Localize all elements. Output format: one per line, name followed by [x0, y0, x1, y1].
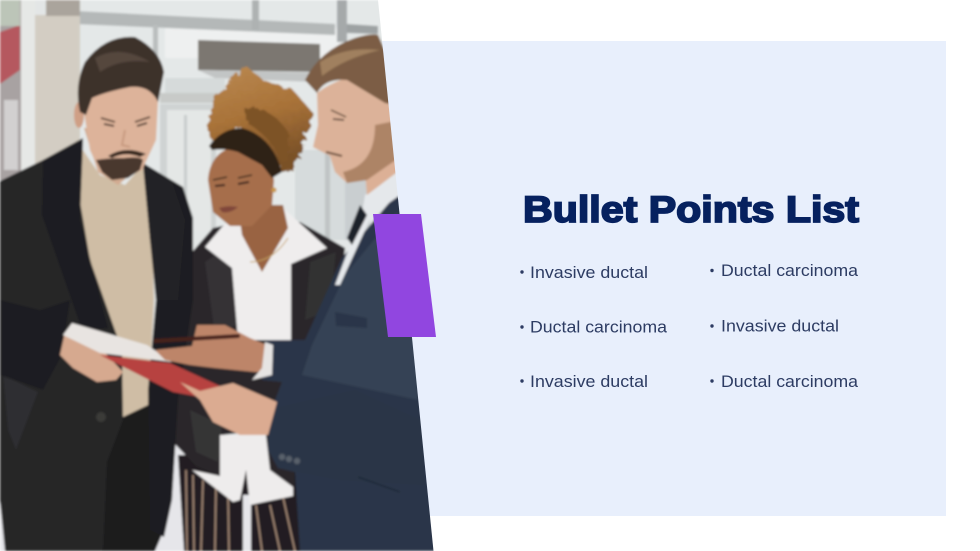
folder and papers — [63, 323, 222, 397]
man left: beard and moustache — [96, 157, 143, 180]
man left: coat — [0, 138, 123, 551]
man left: face — [83, 84, 159, 170]
bullet list: left column — [520, 264, 668, 391]
bullet item: left 1: Invasive ductal — [530, 264, 648, 282]
bullet item: right 3: Ductal carcinoma — [721, 373, 859, 391]
bullet item: left 3: Invasive ductal — [530, 373, 648, 391]
bullet list: right column — [710, 262, 859, 391]
folder: red cover — [100, 355, 222, 397]
man left: trousers — [101, 403, 163, 551]
woman: hair — [207, 65, 313, 178]
woman: upper white shirt — [205, 205, 327, 340]
floor — [0, 445, 300, 551]
man left: neck — [83, 127, 126, 184]
man right: hair — [304, 32, 388, 105]
woman: leather jacket — [173, 222, 345, 488]
title: Bullet Points List — [523, 189, 859, 230]
purple accent parallelogram — [373, 214, 436, 337]
man left: hair — [78, 37, 164, 115]
photo background: office interior — [0, 0, 389, 551]
man right: suit — [262, 190, 440, 551]
panel: pale blue background — [378, 41, 946, 516]
cuff: white shirt — [252, 342, 273, 380]
folder: white papers — [63, 323, 172, 362]
photo: three colleagues reviewing a red folder — [0, 0, 440, 551]
man right: sleeve buttons — [279, 454, 300, 464]
pen — [155, 336, 238, 341]
hand: lower — [180, 382, 277, 435]
woman: trousers — [178, 455, 302, 551]
woman: lower white shirt — [192, 435, 293, 505]
man left: sweater — [76, 140, 154, 417]
bullet item: left 2: Ductal carcinoma — [530, 318, 668, 336]
man right — [262, 34, 440, 551]
pillar and left wall — [33, 15, 80, 175]
hand: upper — [155, 325, 267, 372]
hands holding pen — [155, 325, 277, 435]
man left: hand — [60, 332, 123, 382]
bullet item: right 1: Ductal carcinoma — [721, 262, 859, 280]
man left: coat button — [96, 412, 106, 422]
woman: neck and necklace — [238, 205, 288, 272]
man right: face — [312, 78, 390, 182]
man right: neck — [365, 160, 396, 196]
woman — [173, 65, 345, 551]
woman: face — [208, 145, 274, 226]
bullet item: right 2: Invasive ductal — [721, 318, 839, 336]
man left — [0, 37, 193, 551]
man right: shirt collar and tie — [334, 191, 398, 288]
